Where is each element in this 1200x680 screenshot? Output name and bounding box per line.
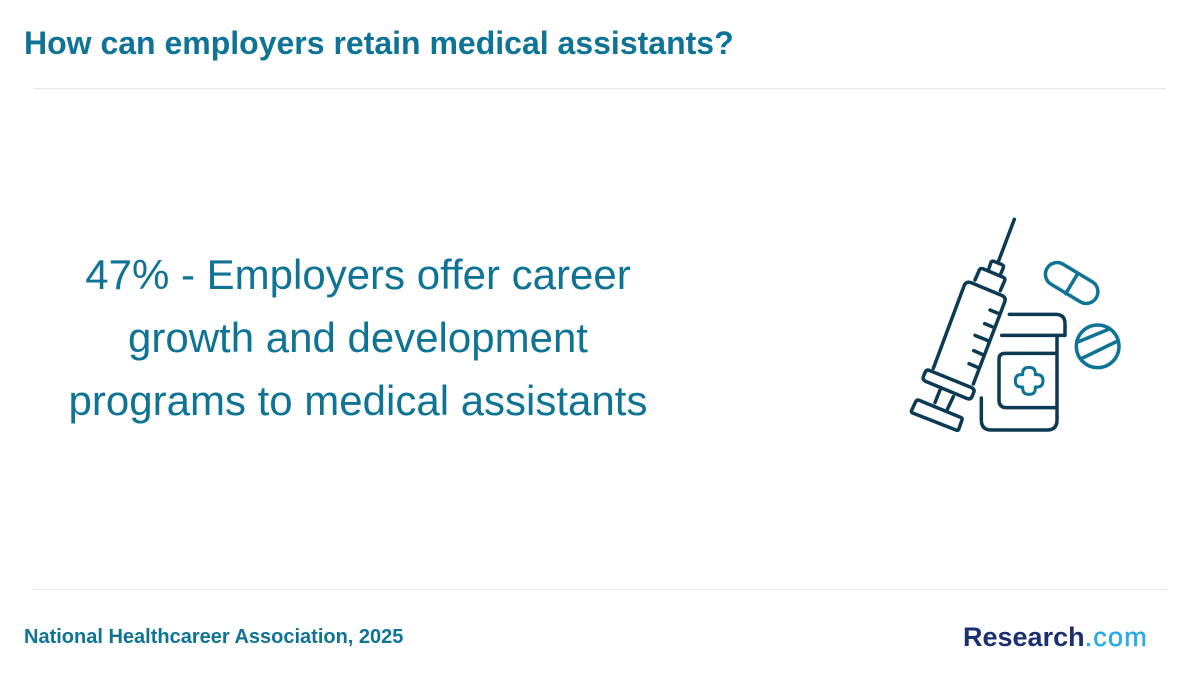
main statistic text: growth and development [128,314,588,361]
main statistic text: programs to medical assistants [69,377,647,424]
logo: Research.com: Research.com [963,622,1148,652]
icon: syringe [911,219,1014,430]
source note: National Healthcareer Association, 2025 [24,626,403,648]
icon: round tablet [1076,325,1119,368]
main statistic text [69,251,647,424]
icon: medical cross [1015,367,1043,394]
title: How can employers retain medical assistants? [24,25,734,61]
icon: syringe, medicine bottle and pills [910,218,1121,432]
main statistic text: 47% - Employers offer career [85,251,631,298]
icon: capsule pill [1041,258,1102,308]
icon: medicine bottle [981,314,1065,430]
